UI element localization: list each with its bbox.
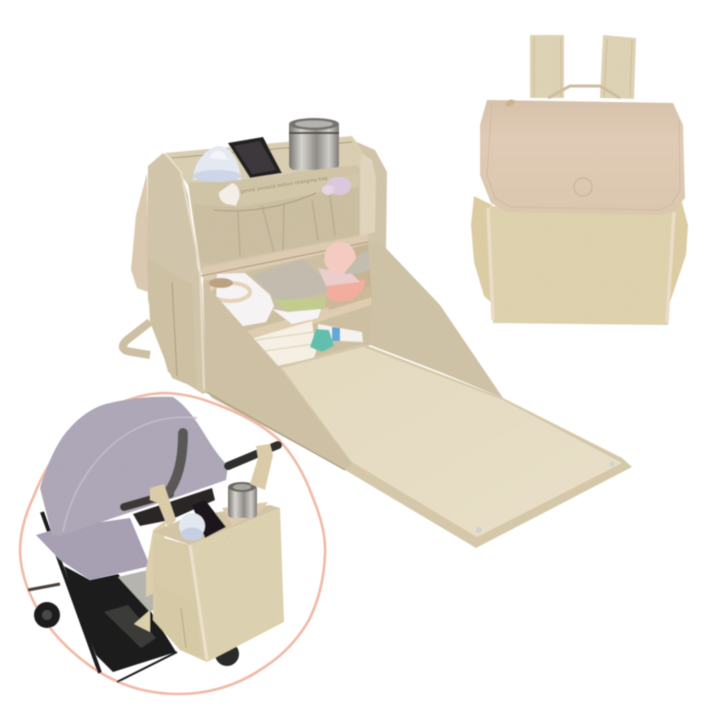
left door triangle (203, 281, 352, 470)
green cloth (274, 298, 327, 312)
main bag open view (123, 118, 632, 548)
inset: stroller with bag attached (20, 393, 325, 694)
zipper edge (206, 392, 345, 470)
organizer bottom edge (200, 234, 368, 281)
closed backpack view (471, 35, 688, 325)
organizer printed band (240, 174, 358, 206)
mat snaps (476, 462, 614, 533)
right door triangle (368, 240, 503, 398)
inset bag (134, 444, 284, 662)
white cloth below (272, 309, 321, 324)
shoulder straps (530, 35, 636, 99)
top interior (165, 136, 362, 185)
diapers (250, 321, 316, 368)
side trim (488, 208, 674, 322)
changing mat (282, 347, 622, 537)
front body (489, 206, 676, 325)
pink snail toy (324, 242, 356, 274)
baby bottle (193, 146, 241, 182)
shoulder strap loop (123, 322, 150, 355)
gathered pocket (193, 187, 359, 264)
inset flask (228, 482, 257, 518)
compartment contents (206, 242, 379, 386)
inset bag interior and strap (153, 500, 280, 545)
pacifier clip (322, 177, 351, 195)
grey towel (253, 259, 330, 302)
right body side (352, 140, 387, 250)
left side panel (147, 153, 207, 394)
steel flask (289, 118, 339, 170)
stroller basket and frame (28, 512, 239, 682)
inset bottle (179, 513, 205, 540)
organizer printed band: gently pockets before changing bag (240, 175, 328, 194)
cream tube (318, 324, 363, 342)
organizer tray front (188, 165, 359, 270)
zipper pull (504, 98, 516, 108)
inset straps (150, 444, 273, 528)
wooden teether (209, 278, 250, 301)
leather top flap (480, 100, 685, 215)
back flap (131, 173, 148, 292)
folded white clothes (216, 273, 274, 328)
side mesh pocket (147, 257, 196, 388)
top handle (548, 86, 620, 98)
mat outer rim (214, 344, 632, 548)
flap logo (574, 178, 592, 196)
inset ring (20, 393, 325, 694)
left side pocket (471, 196, 494, 305)
stroller handlebar (124, 433, 278, 507)
spoon (219, 183, 240, 206)
compartment interior (203, 240, 376, 392)
pink bowl (326, 278, 366, 302)
stroller canopy (36, 397, 228, 580)
right side pocket (670, 195, 688, 302)
grey toy (344, 251, 379, 274)
teal pacifier (310, 329, 334, 352)
upper shelf (240, 295, 372, 339)
phone in organizer (228, 137, 282, 178)
